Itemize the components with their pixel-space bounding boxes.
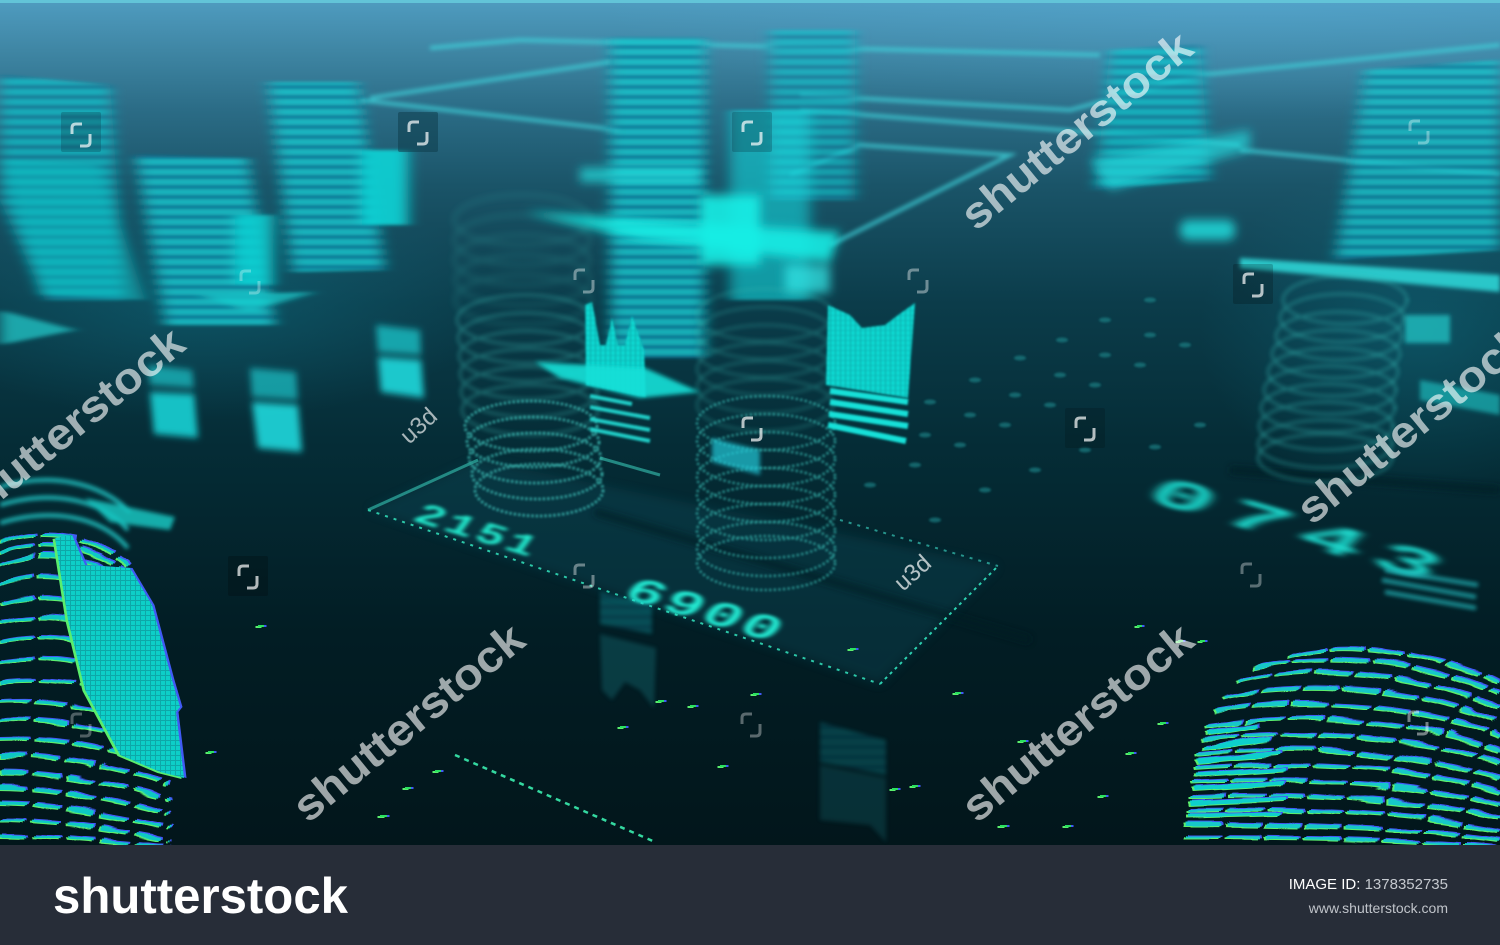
dotted cylinder: right — [1258, 276, 1407, 482]
mirrored reflections — [600, 592, 886, 842]
big ring stack bottom right — [1185, 648, 1500, 848]
central column reflection — [712, 438, 760, 475]
floor panel — [368, 460, 998, 684]
dotted cylinder: left center — [454, 195, 603, 516]
watermark icons — [61, 112, 1428, 736]
dotted cylinder: center — [697, 289, 835, 590]
big teal shape bottom left — [55, 535, 184, 778]
number 6900: 6900 — [612, 571, 796, 652]
mini chart right with caption — [826, 303, 915, 441]
number 0743: 0743 — [1132, 470, 1470, 596]
big ring stack bottom left — [0, 480, 175, 848]
background circuit lines — [360, 40, 1500, 245]
number 2151: 2151 — [405, 498, 549, 566]
mini chart left with caption — [535, 302, 700, 441]
watermark: top right: shutterstock — [951, 22, 1203, 240]
green floor markers — [208, 625, 1205, 827]
watermark: lower center: shutterstock — [283, 614, 535, 832]
perspective floor panel outline — [368, 458, 998, 684]
watermark: u3d left: u3d — [395, 403, 443, 449]
watermark: lower right: shutterstock — [952, 614, 1204, 832]
small blurred bars — [148, 325, 424, 452]
blurred background columns left — [0, 75, 408, 345]
footer logo: shutterstock — [53, 868, 348, 924]
dashed floor line lower — [455, 755, 655, 842]
footer website: www.shutterstock.com — [1308, 900, 1448, 916]
floor shadow edges — [594, 468, 1498, 618]
blurred right columns — [1090, 45, 1500, 260]
footer bar — [0, 845, 1500, 945]
caption under 0743 — [1382, 570, 1478, 608]
watermark: u3d right: u3d — [889, 550, 937, 596]
blurred central columns — [525, 30, 855, 358]
dense left edge of right ring stack — [1188, 725, 1285, 817]
footer image id: IMAGE ID: 1378352735 — [1289, 876, 1448, 893]
dot grid right — [864, 298, 1206, 522]
